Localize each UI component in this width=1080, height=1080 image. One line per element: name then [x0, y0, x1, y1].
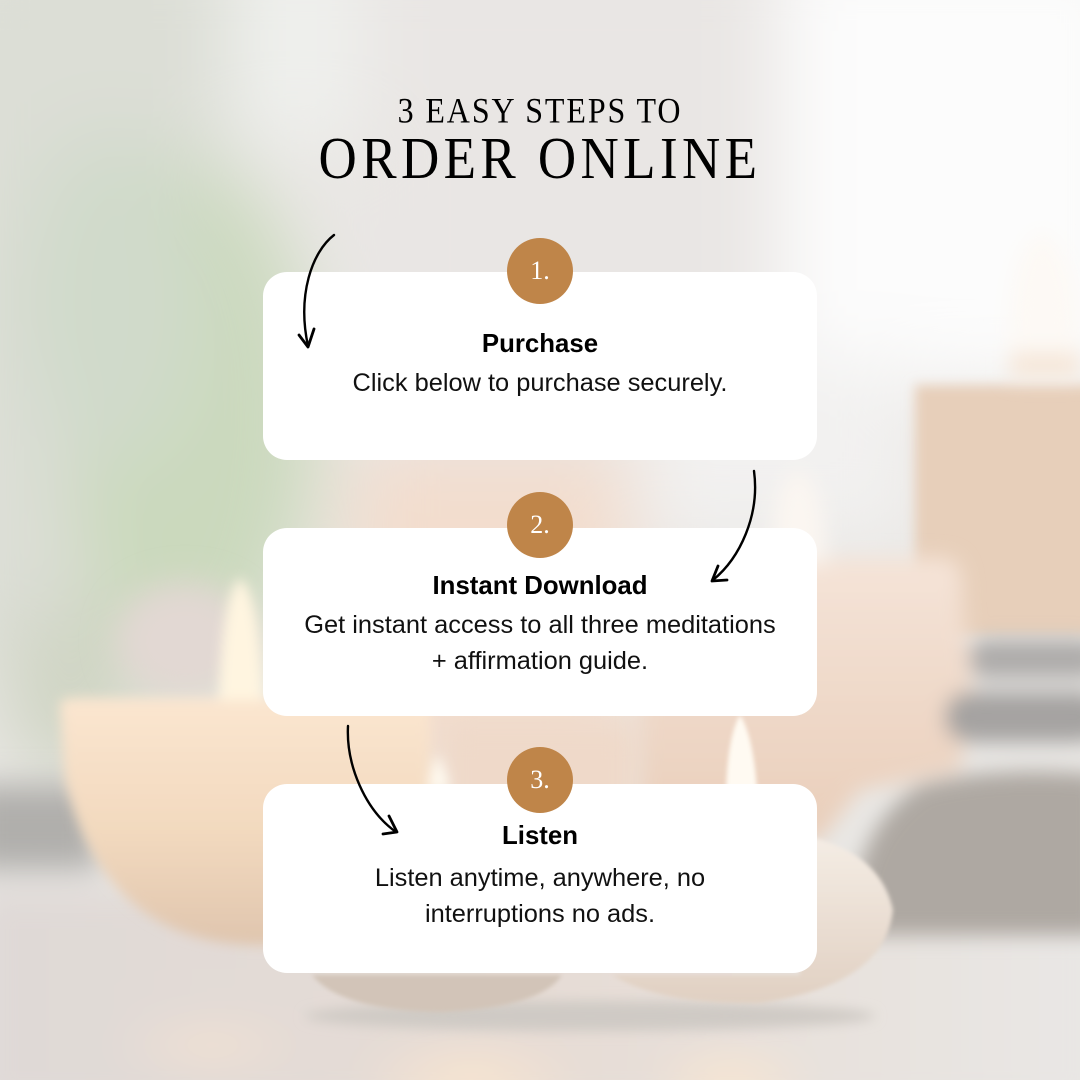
step 3 text — [375, 864, 705, 928]
heading line: order online: ORDER ONLINE — [319, 127, 761, 191]
step 2 text: Get instant access to all three meditations — [304, 611, 776, 639]
panel: step 1 card — [263, 272, 817, 460]
heading line: 3 easy steps to: 3 EASY STEPS TO — [398, 90, 682, 130]
step 2 text — [304, 611, 776, 675]
step 3 heading: Listen — [502, 822, 578, 850]
badge: step 3: 3. — [530, 765, 550, 794]
step 3 text: interruptions no ads. — [425, 900, 655, 928]
step 3 text: Listen anytime, anywhere, no — [375, 864, 705, 892]
panel: step 3 card — [263, 784, 817, 973]
badge: step 1 — [507, 238, 573, 304]
arrow: to step 2 — [710, 470, 756, 582]
badge: step 3 — [507, 747, 573, 813]
arrow: to step 3 — [346, 724, 398, 836]
arrow: to step 1 — [298, 234, 336, 348]
panel: step 2 card — [263, 528, 817, 716]
badge: step 2 — [507, 492, 573, 558]
step 2 heading: Instant Download — [433, 572, 647, 600]
badge: step 1: 1. — [530, 256, 550, 285]
step 1 text: Click below to purchase securely. — [353, 369, 727, 397]
step 2 text: + affirmation guide. — [432, 647, 648, 675]
step 1 heading: Purchase — [482, 330, 598, 358]
badge: step 2: 2. — [530, 510, 550, 539]
title — [319, 90, 761, 191]
